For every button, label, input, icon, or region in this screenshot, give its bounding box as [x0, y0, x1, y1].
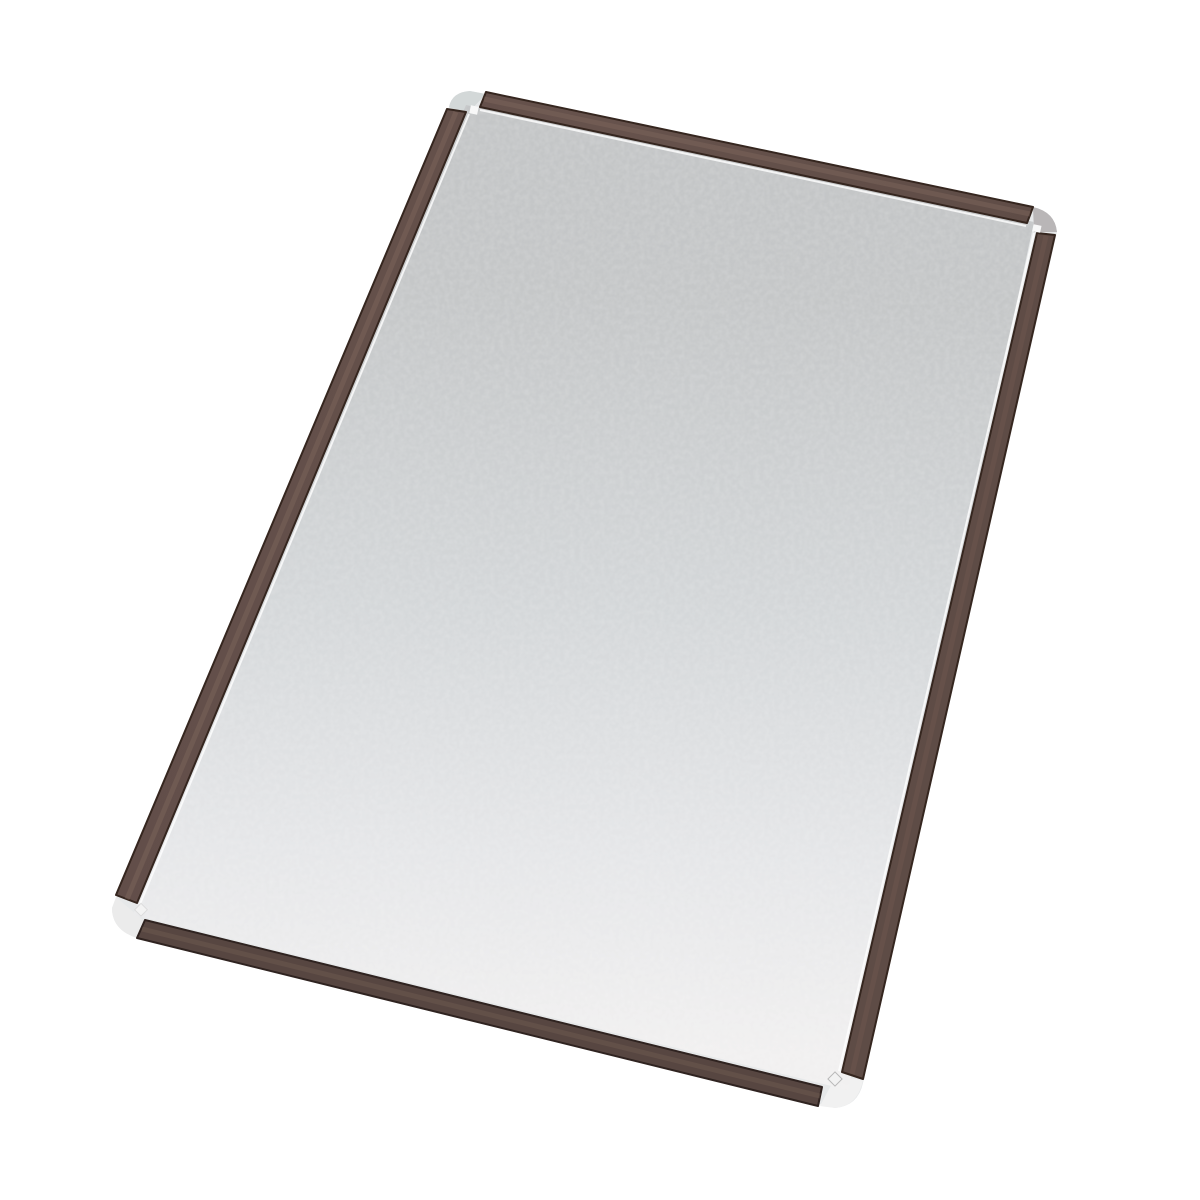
wood strip: left — [116, 109, 469, 904]
metal base sheet with rounded corners — [112, 91, 1057, 1108]
metal panel surface — [133, 105, 1034, 1090]
wood strip: bottom — [137, 920, 822, 1106]
corner bracket details — [135, 105, 1042, 1086]
wood strip: top — [480, 92, 1033, 226]
wood strip: right — [839, 233, 1055, 1079]
